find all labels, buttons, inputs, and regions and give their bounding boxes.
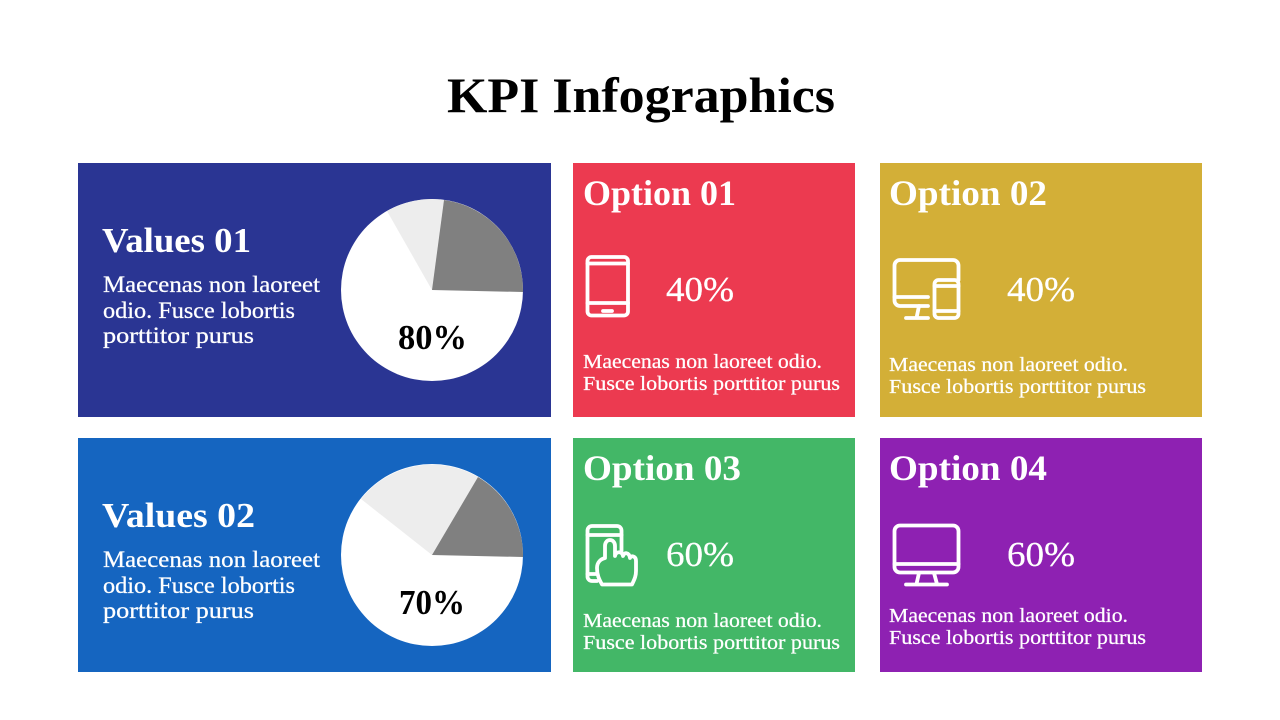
value: 40%: 40% [1007,270,1075,309]
text block: option 01: Maecenas non laoreet odio. [583,351,822,373]
panel: option 02 [880,163,1202,417]
panel: values 02 [78,438,551,672]
text block: option 04 [889,605,1146,649]
pie chart: values 01: 80% [398,318,467,357]
text block: option 03: Fusce lobortis porttitor purus [583,632,840,654]
text block: values 02: Maecenas non laoreet [103,547,321,572]
text block: option 03 [583,610,840,654]
text block: option 04: Fusce lobortis porttitor purus [889,627,1146,649]
heading: option 01: Option 01 [583,173,736,213]
text block: option 02: Fusce lobortis porttitor purus [889,376,1146,398]
text block: values 01: odio. Fusce lobortis [103,298,295,323]
pie chart: values 02: 70% [399,583,465,622]
text block: option 02 [889,354,1146,398]
text block: option 04: Maecenas non laoreet odio. [889,605,1128,627]
panel: option 01 [573,163,855,417]
heading: option 04: Option 04 [889,448,1047,488]
panel: option 03 [573,438,855,672]
text block: values 02: odio. Fusce lobortis [103,573,295,598]
panel: values 01 [78,163,551,417]
icon: monitor [894,526,958,584]
text block: option 01 [583,351,840,395]
title: KPI Infographics [447,67,835,123]
value: 40%: 40% [666,270,734,309]
text block: values 02 [103,547,321,623]
pie chart: values 01 [341,199,523,381]
text block: values 01: Maecenas non laoreet [103,272,321,297]
heading: option 02: Option 02 [889,173,1047,213]
text block: values 01 [103,272,321,348]
text block: option 01: Fusce lobortis porttitor purus [583,373,840,395]
icon: monitor and phone [894,260,958,318]
text block: values 02: porttitor purus [103,598,254,623]
pie chart: values 02 [341,464,523,646]
panel: option 04 [880,438,1202,672]
text block: option 02: Maecenas non laoreet odio. [889,354,1128,376]
icon: hand on phone [588,526,636,584]
icon: tablet [588,257,628,316]
value: 60%: 60% [666,535,734,574]
text block: values 01: porttitor purus [103,323,254,348]
value: 60%: 60% [1007,535,1075,574]
heading: values 02: Values 02 [102,496,255,535]
heading: values 01: Values 01 [102,221,251,260]
heading: option 03: Option 03 [583,448,741,488]
text block: option 03: Maecenas non laoreet odio. [583,610,822,632]
